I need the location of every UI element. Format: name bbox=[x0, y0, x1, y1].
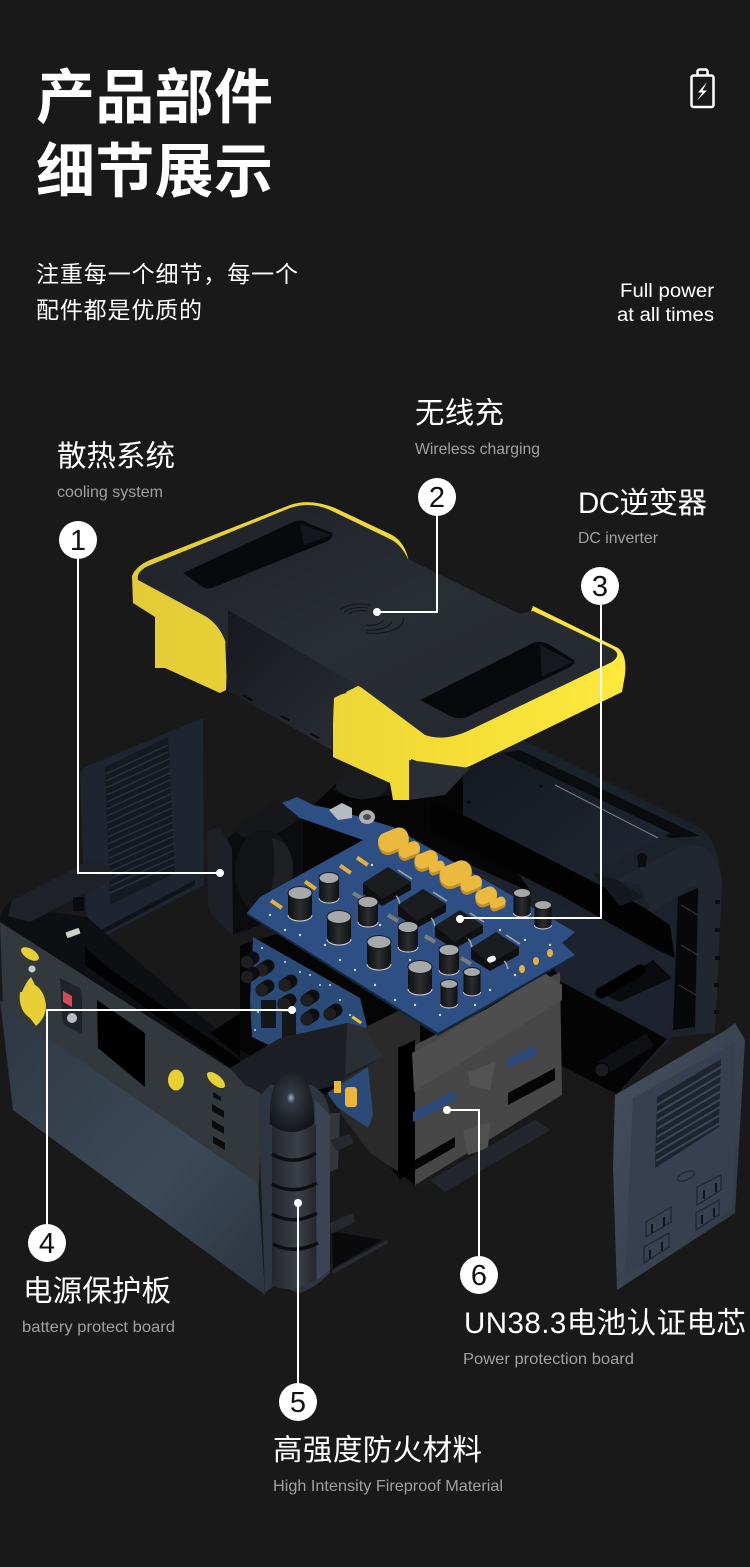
vents bbox=[212, 1092, 225, 1150]
callout 5: fireproof material: 5 bbox=[290, 1387, 306, 1419]
post side tubes and foot bbox=[330, 1113, 340, 1172]
battery pack bbox=[340, 972, 562, 1192]
secondary PCB and parts behind bbox=[241, 937, 368, 1060]
title: 细节展示 bbox=[36, 139, 273, 205]
corner post bbox=[258, 1085, 330, 1293]
lid underside disc bbox=[332, 771, 392, 800]
left louver door bbox=[80, 718, 204, 942]
yellow components bbox=[375, 828, 507, 913]
callout 1: cooling system: 1 bbox=[70, 525, 86, 557]
sockets bbox=[644, 1175, 721, 1263]
black interior backdrop bbox=[240, 755, 563, 1180]
slogan: Full power at all times: at all times bbox=[617, 305, 714, 326]
callout 4: battery protect board bbox=[22, 1006, 296, 1336]
main PCB bbox=[247, 797, 575, 1036]
slogan: Full power at all times: Full power bbox=[620, 281, 715, 302]
callout 1: cooling system: cooling system bbox=[57, 484, 163, 501]
callout 4: battery protect board: 电源保护板 bbox=[23, 1275, 171, 1308]
callout 5: fireproof material: 高强度防火材料 bbox=[273, 1434, 482, 1467]
callout 6: UN38.3 battery cell: Power protection board bbox=[463, 1351, 634, 1368]
callout 2: wireless charging bbox=[373, 397, 540, 616]
callout 2: wireless charging: 无线充 bbox=[415, 397, 504, 430]
top surface bbox=[138, 505, 617, 738]
handle arch bbox=[230, 1023, 383, 1095]
callout 2: wireless charging: Wireless charging bbox=[415, 441, 540, 458]
callout 4: battery protect board: 4 bbox=[39, 1228, 55, 1260]
yellow button and indicator bbox=[168, 1070, 184, 1090]
callout 4: battery protect board: battery protect board bbox=[22, 1319, 175, 1336]
callout 5: fireproof material bbox=[273, 1199, 503, 1495]
callout 6: UN38.3 battery cell: UN38.3电池认证电芯 bbox=[464, 1307, 746, 1340]
cooling fan bbox=[207, 802, 303, 936]
callout 3: DC inverter: DC逆变器 bbox=[578, 487, 707, 520]
icon: battery with lightning bolt bbox=[692, 70, 714, 107]
door vent bbox=[655, 1059, 721, 1168]
right side door bbox=[613, 1023, 745, 1290]
connector and speaker disc bbox=[359, 810, 375, 824]
callout 3: DC inverter bbox=[456, 487, 707, 923]
title: 产品部件 bbox=[36, 65, 273, 131]
center body side bbox=[224, 606, 362, 750]
subtitle text: 配件都是优质的 bbox=[36, 297, 202, 323]
callout 6: UN38.3 battery cell: 6 bbox=[471, 1260, 487, 1292]
title bbox=[36, 65, 273, 205]
slogan: Full power at all times bbox=[617, 281, 715, 326]
display window bbox=[97, 1000, 145, 1087]
exploded product illustration bbox=[0, 502, 745, 1295]
rear lower block bbox=[560, 981, 667, 1094]
left housing rim bbox=[0, 860, 262, 1077]
callout 3: DC inverter: DC inverter bbox=[578, 530, 659, 547]
yellow indicator pill bbox=[19, 944, 41, 964]
PCB fragment behind post bbox=[327, 1067, 373, 1128]
callout 2: wireless charging: 2 bbox=[429, 482, 445, 514]
capacitors bbox=[288, 886, 312, 921]
callout 1: cooling system bbox=[57, 440, 224, 877]
wireless symbol bbox=[340, 604, 403, 633]
callout 1: cooling system: 散热系统 bbox=[57, 440, 175, 473]
front left housing bbox=[0, 922, 388, 1295]
callout 6: UN38.3 battery cell bbox=[443, 1106, 746, 1368]
wireless charging lid bbox=[132, 502, 625, 800]
rim bbox=[132, 502, 625, 800]
rear housing bbox=[430, 740, 722, 1094]
subtitle text bbox=[36, 261, 298, 323]
yellow charge port bbox=[20, 977, 46, 1026]
callout 3: DC inverter: 3 bbox=[592, 571, 608, 603]
subtitle text: 注重每一个细节，每一个 bbox=[36, 261, 298, 287]
callout 5: fireproof material: High Intensity Fireproof Material bbox=[273, 1478, 503, 1495]
switch module bbox=[60, 978, 82, 1034]
corner plate and right post bbox=[593, 873, 643, 906]
black chips bbox=[353, 867, 412, 906]
handle recesses bbox=[183, 520, 332, 589]
